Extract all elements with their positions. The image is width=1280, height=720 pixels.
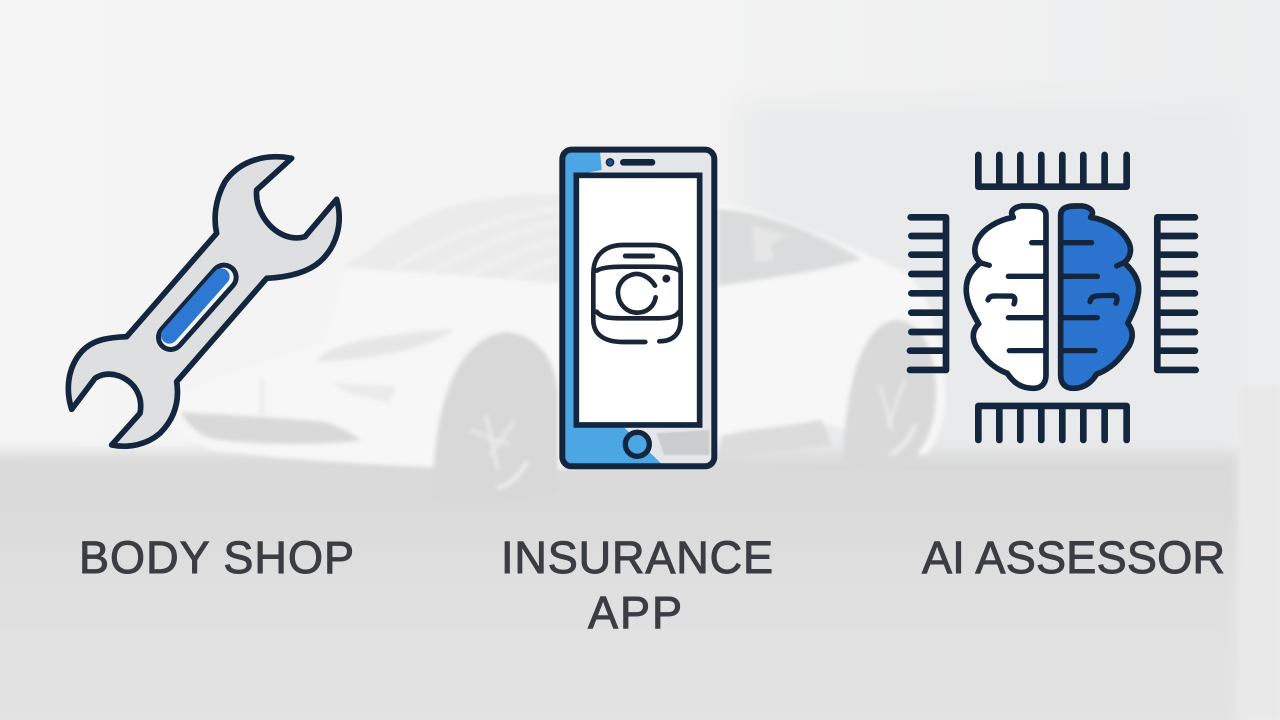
phone camera and speaker <box>606 159 652 166</box>
label: insurance app <box>501 532 773 638</box>
chip pins: right <box>1157 217 1196 370</box>
chip pins: left <box>910 217 946 370</box>
icon: wrench <box>68 157 339 446</box>
brain right hemisphere <box>1061 206 1139 388</box>
car front wheel <box>433 332 558 502</box>
car rear wheel <box>843 320 936 469</box>
home button <box>625 432 649 456</box>
car headlight <box>316 329 455 362</box>
car silhouette <box>172 192 945 502</box>
label: insurance app: APP <box>588 587 682 638</box>
car side window <box>718 209 862 286</box>
wrench slot <box>169 277 224 337</box>
car front grille <box>180 412 361 444</box>
camera icon <box>593 245 681 342</box>
icon: AI brain chip <box>910 155 1196 440</box>
car windshield <box>343 194 562 284</box>
label: insurance app: INSURANCE <box>501 532 773 583</box>
icon: smartphone with camera <box>562 150 714 466</box>
phone body <box>562 150 714 466</box>
car front fog light <box>332 383 397 403</box>
phone screen <box>576 175 700 425</box>
car sill <box>718 420 832 460</box>
chip pins: bottom <box>978 406 1127 440</box>
brain left hemisphere <box>966 206 1046 388</box>
label: AI assessor: AI ASSESSOR <box>922 532 1225 583</box>
label: body shop: BODY SHOP <box>79 532 354 583</box>
chip pins: top <box>978 155 1127 187</box>
